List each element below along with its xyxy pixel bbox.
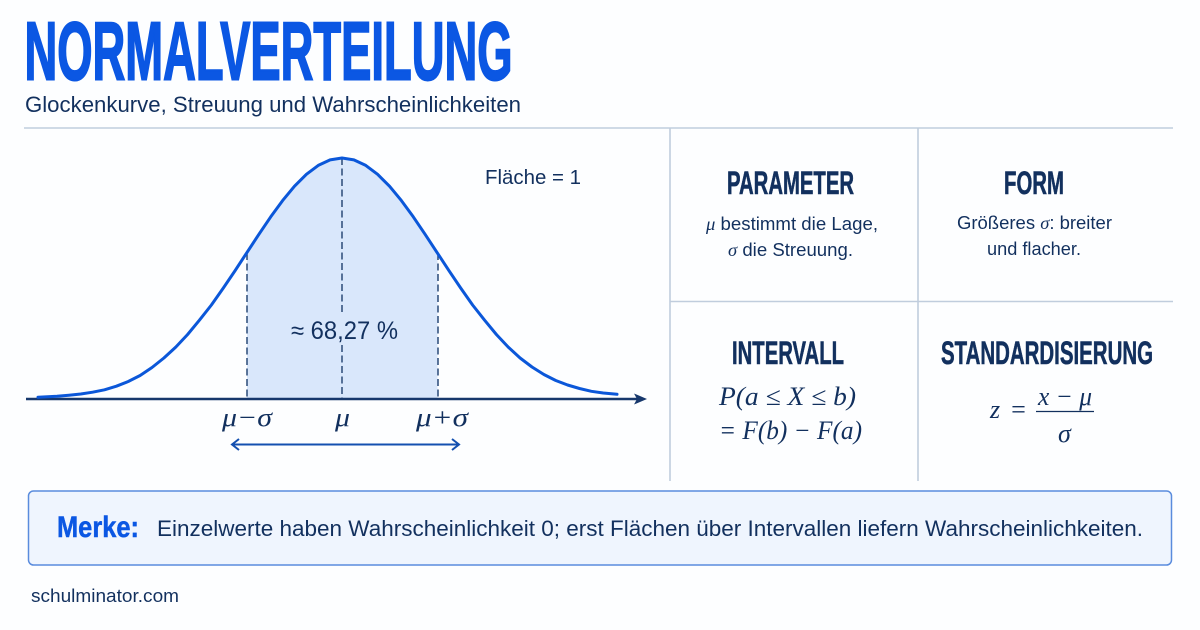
panel: Parameter: σ die Streuung.: [728, 240, 853, 260]
axis labels: μ−σ: [221, 403, 273, 432]
body text: μ bestimmt die Lage,: [705, 214, 878, 234]
axis labels: [221, 403, 469, 432]
panel: Intervall: [718, 335, 862, 445]
heading: PARAMETER: [727, 165, 854, 201]
body text: Größeres σ: breiter: [957, 213, 1112, 233]
callout label: Merke:: [57, 511, 139, 544]
panel: Standardisierung: [941, 335, 1153, 448]
panel: Parameter: [705, 165, 878, 260]
panel: Form: und flacher.: [987, 239, 1081, 259]
callout: [28, 491, 1172, 565]
formula: σ: [1058, 419, 1072, 448]
chart: bell curve: [26, 158, 647, 450]
curve: [38, 158, 617, 397]
dashed sigma lines: [247, 158, 438, 398]
shaded area one sigma: [247, 158, 438, 399]
panel: Intervall: = F(b) − F(a): [719, 416, 862, 445]
label: area total: Fläche = 1: [485, 167, 581, 189]
footer: schulminator.com: [31, 586, 179, 606]
panel: Form: [957, 165, 1112, 259]
subtitle: Glockenkurve, Streuung und Wahrscheinlichkeiten: [25, 92, 521, 117]
formula: P(a ≤ X ≤ b): [718, 382, 856, 411]
axis arrow: [26, 394, 647, 404]
heading: INTERVALL: [732, 335, 844, 371]
axis labels: μ: [334, 403, 350, 432]
label: percentage: ≈ 68,27 %: [291, 317, 398, 345]
heading: FORM: [1004, 165, 1064, 201]
title: NORMALVERTEILUNG: [24, 4, 512, 98]
formula: x − μ: [1037, 382, 1092, 411]
formula: [989, 382, 1094, 448]
double arrow: one sigma range: [232, 439, 459, 450]
axis labels: μ+σ: [415, 403, 469, 432]
formula: z =: [989, 395, 1027, 424]
callout text: Einzelwerte haben Wahrscheinlichkeit 0; erst Flächen über Intervallen liefern Wahrscheinlichkeiten.: [157, 516, 1143, 541]
